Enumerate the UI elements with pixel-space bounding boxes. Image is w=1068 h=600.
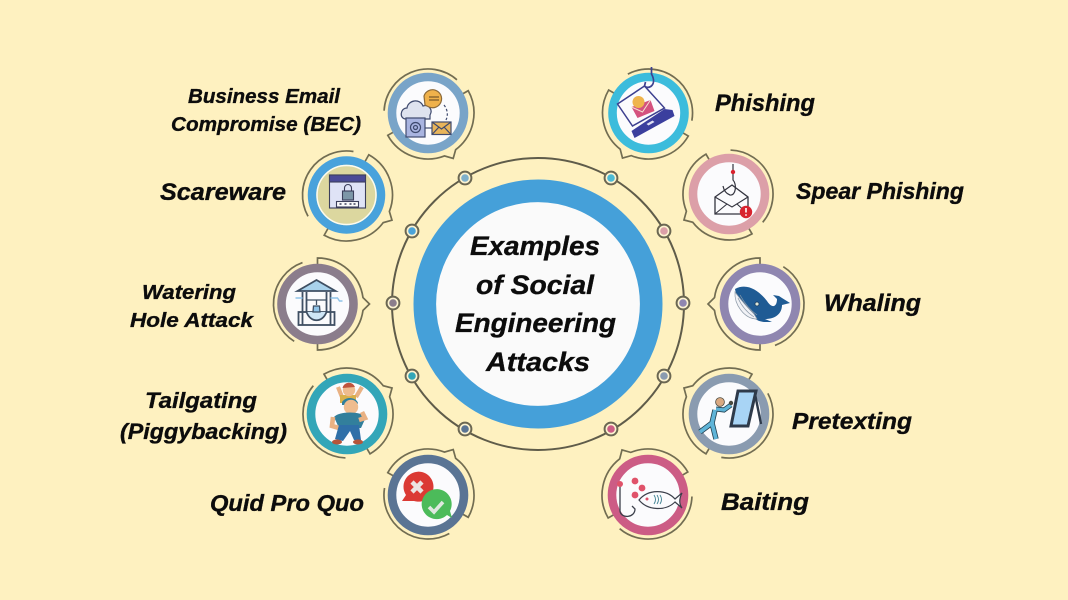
callout arcs (286, 133, 414, 260)
label: phishing: Phishing (715, 90, 815, 117)
icon: hooked envelope (715, 164, 752, 218)
icon: hook, bait and fish (617, 478, 682, 516)
bubble: pretexting (661, 348, 790, 476)
icon: cloud, mail and chat (401, 90, 451, 137)
ring (282, 268, 354, 340)
ring (392, 459, 464, 531)
bubble: phishing (583, 52, 710, 181)
ring (311, 378, 383, 450)
label: watering hole attack: Watering (142, 282, 236, 304)
callout arcs (582, 427, 710, 556)
callout arcs (366, 427, 493, 556)
orbit ring (392, 158, 684, 450)
bubble: scareware (286, 133, 414, 260)
label: spear phishing: Spear Phishing (796, 178, 964, 204)
icon: child on shoulders (332, 383, 366, 444)
ring (612, 77, 684, 149)
callout arcs (661, 348, 790, 476)
ring (693, 158, 765, 230)
icon: person pushing mirror (700, 391, 761, 439)
bubble: spear phishing (661, 132, 790, 260)
ring (612, 459, 684, 531)
label: business email compromise: Business Email (188, 86, 340, 108)
label: tailgating (120, 388, 287, 444)
icon: red and green speech bubbles (402, 472, 452, 519)
label: tailgating: Tailgating (145, 388, 258, 413)
bubble: tailgating (286, 348, 415, 476)
blue ring (425, 191, 651, 417)
label: watering hole attack (130, 282, 254, 332)
title: of Social (476, 270, 595, 300)
callout arcs (286, 348, 415, 476)
title: Examples (470, 231, 600, 261)
callout arcs (583, 52, 710, 181)
bubble: whaling (708, 258, 804, 350)
label: whaling: Whaling (824, 290, 921, 317)
bubble: baiting (582, 427, 710, 556)
label: quid pro quo: Quid Pro Quo (210, 490, 364, 516)
central hub (392, 158, 684, 450)
ring (693, 378, 765, 450)
title (455, 231, 617, 377)
label: business email compromise (171, 86, 361, 136)
icon: laptop with hook (618, 67, 674, 138)
bubble: watering hole attack (273, 258, 370, 350)
callout arcs (366, 52, 493, 181)
label: tailgating: (Piggybacking) (120, 419, 287, 444)
ring (724, 268, 796, 340)
label: watering hole attack: Hole Attack (130, 310, 254, 332)
label: pretexting: Pretexting (792, 408, 912, 434)
bubble: business email compromise (366, 52, 493, 181)
title: Engineering (455, 308, 617, 338)
icon: browser window with lock (330, 175, 366, 208)
label: scareware: Scareware (160, 179, 286, 206)
icon: well (296, 280, 342, 325)
icon: whale (735, 287, 790, 322)
callout arcs (661, 132, 790, 260)
bubble: quid pro quo (366, 427, 493, 556)
callout arcs (708, 258, 804, 350)
label: business email compromise: Compromise (BEC) (171, 114, 361, 136)
title: Attacks (485, 347, 590, 377)
ring (392, 77, 464, 149)
orbit connector dots (387, 172, 689, 435)
callout arcs (273, 258, 370, 350)
label: baiting: Baiting (721, 489, 809, 516)
inner white line (317, 166, 376, 224)
ring (312, 160, 381, 230)
